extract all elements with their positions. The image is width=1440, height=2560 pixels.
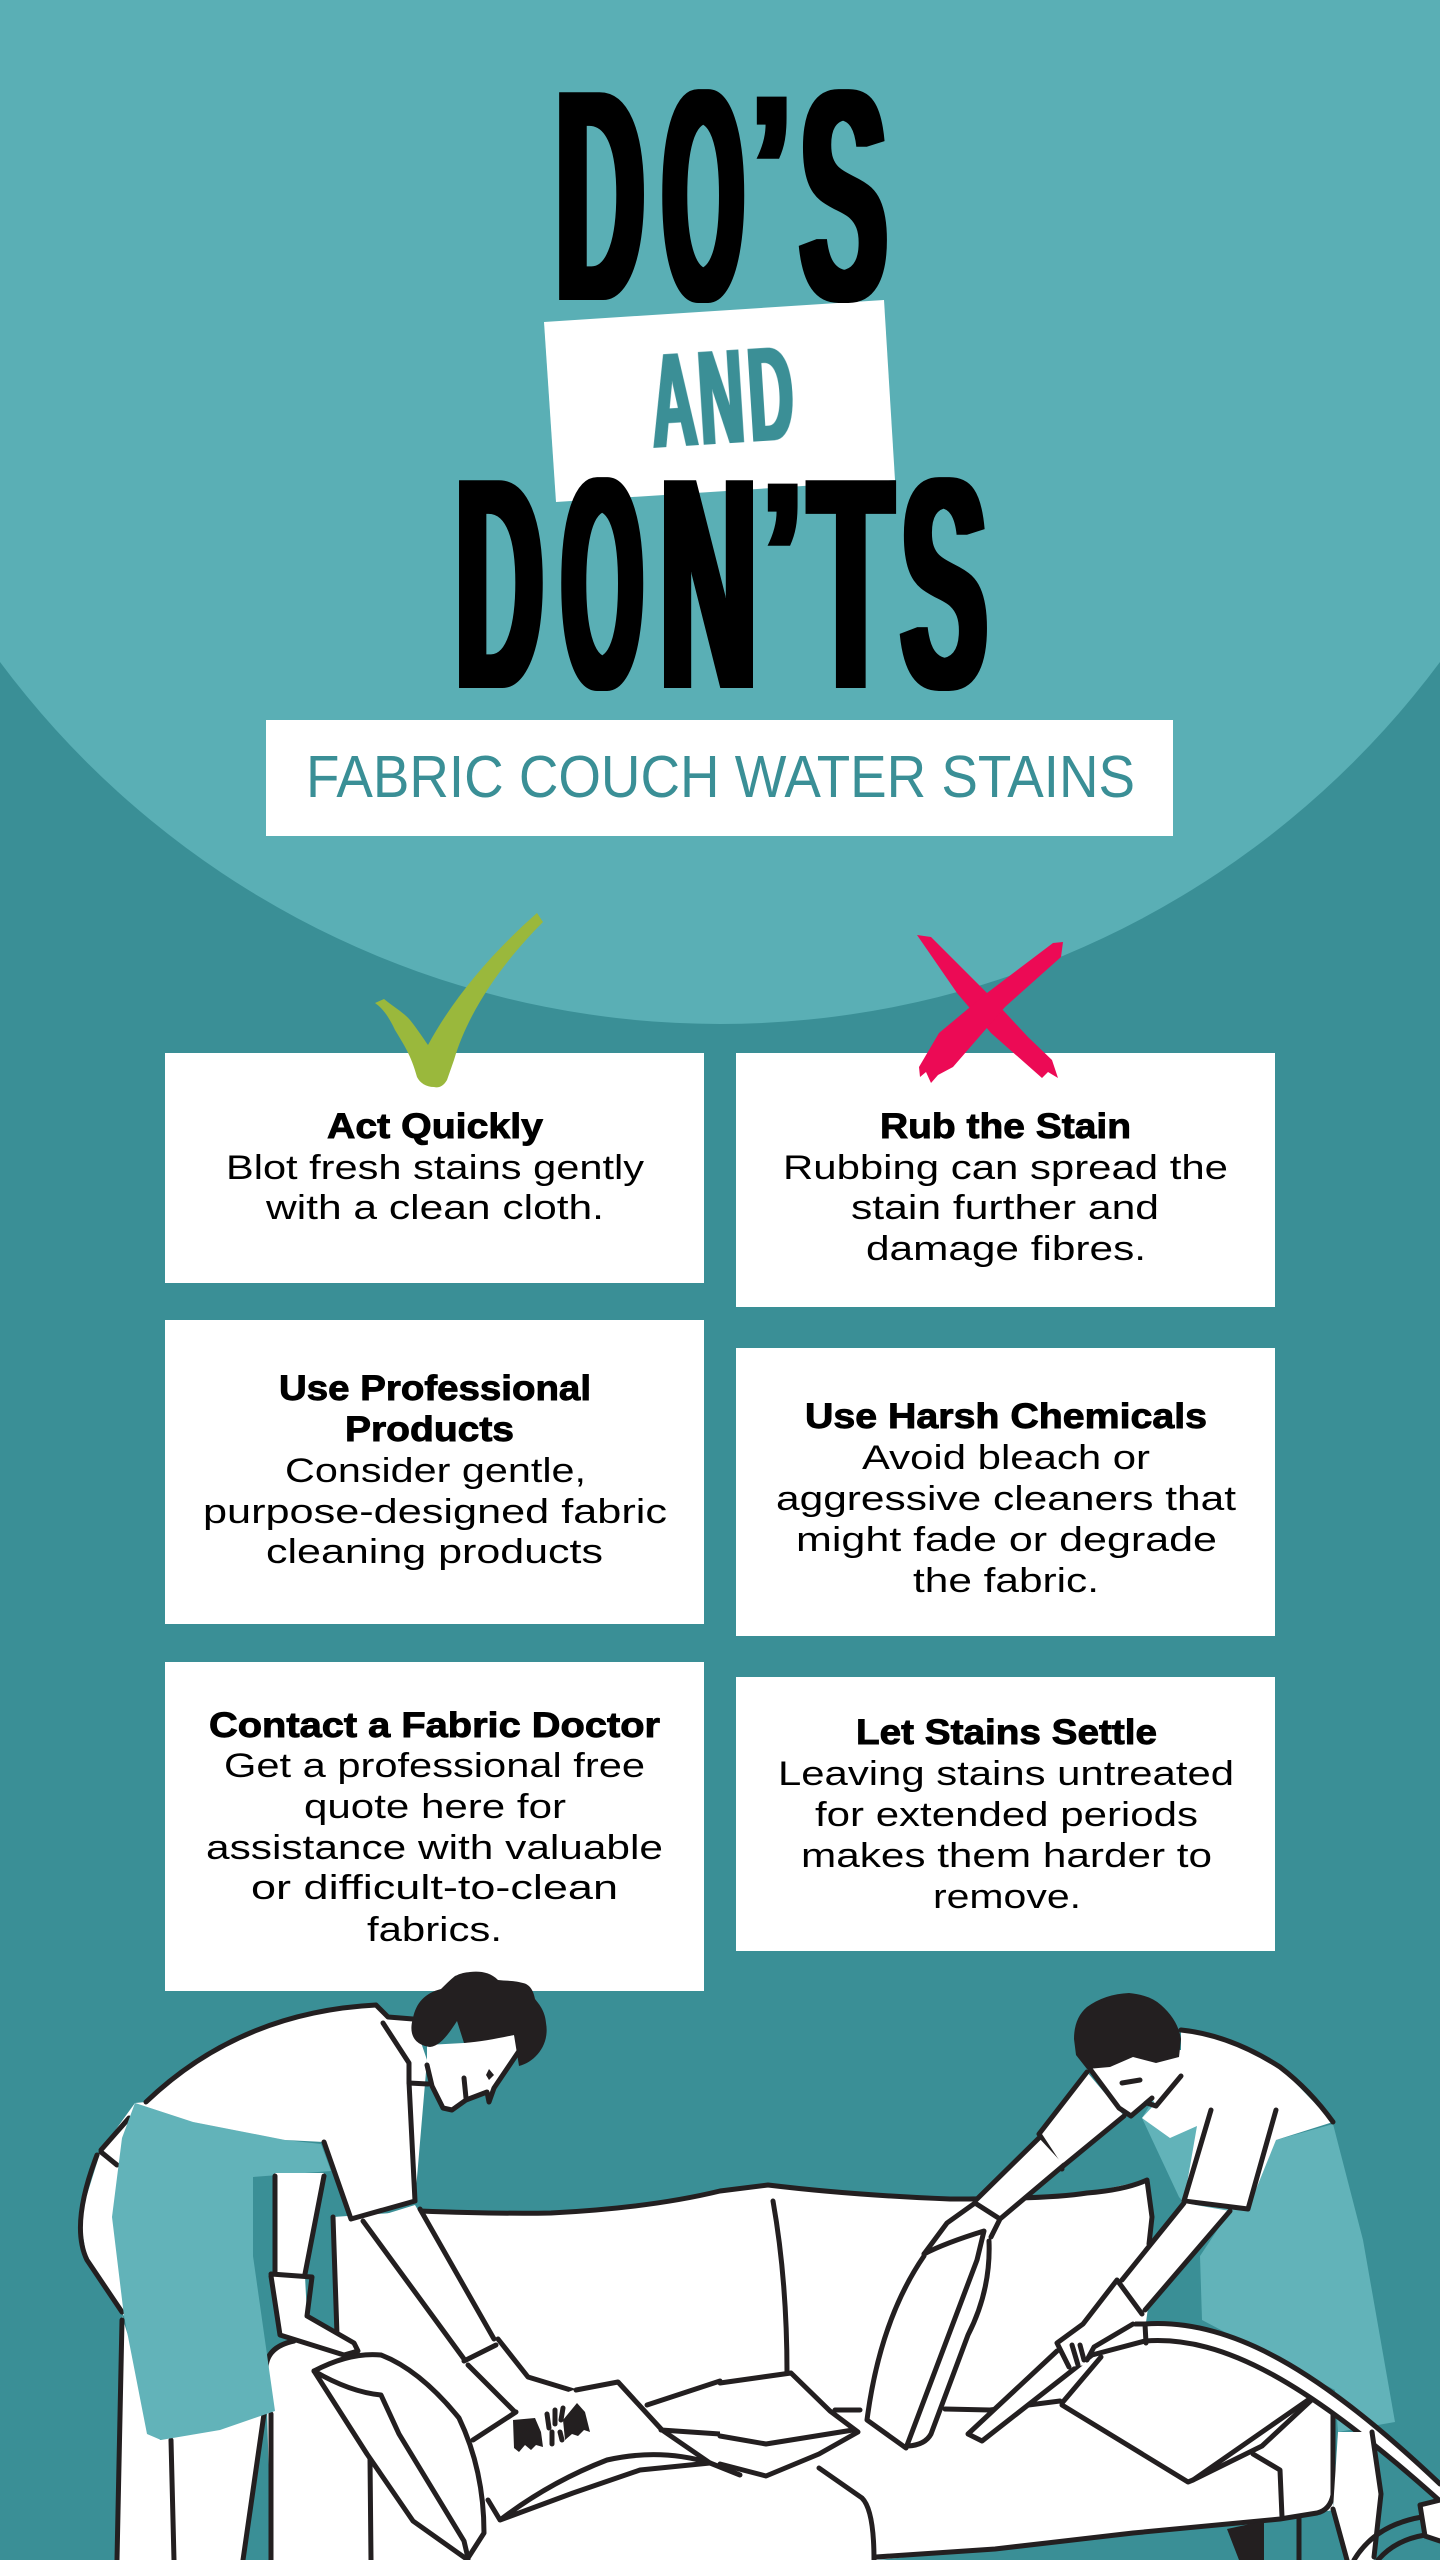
text block: avoid <box>776 1439 1237 1600</box>
title: DON'TS: ’ <box>763 436 802 682</box>
text block: rubbing: stain further and <box>851 1189 1159 1227</box>
apron <box>1142 2053 1395 2432</box>
text block: rubbing: Rubbing can spread the <box>783 1149 1228 1187</box>
panel: do 3 <box>165 1662 704 1991</box>
text block: quote: quote here for <box>304 1788 566 1826</box>
panel: don't 1 <box>736 1053 1275 1307</box>
subtitle text: FABRIC COUCH WATER STAINS <box>306 744 1135 810</box>
text block: blot: Blot fresh stains gently <box>226 1149 644 1187</box>
face <box>427 2035 519 2110</box>
back arm and glove <box>271 2173 358 2355</box>
text block: quote <box>206 1747 663 1949</box>
heading: Use Professional Products: Products <box>345 1410 514 1449</box>
torso <box>135 2005 428 2219</box>
text block: quote: fabrics. <box>367 1911 502 1949</box>
forearm and hand <box>924 2138 1064 2254</box>
icon: green check <box>375 913 543 1087</box>
cushion under left hand <box>473 2381 740 2520</box>
hand fingers <box>513 2403 590 2452</box>
title: DO'S: O <box>663 27 743 364</box>
torso <box>1142 2030 1333 2209</box>
title: DON'TS: D <box>456 415 543 752</box>
tilted white banner with AND <box>544 300 895 502</box>
illustration: right-hand cushion, hose and vacuum <box>968 2280 1440 2560</box>
icon: red cross <box>917 935 1063 1083</box>
text block: avoid: the fabric. <box>913 1562 1099 1600</box>
face <box>1090 2050 1181 2116</box>
subtitle box <box>266 720 1173 836</box>
text block: consider <box>203 1452 667 1571</box>
text block: leaving: makes them harder to <box>801 1837 1212 1875</box>
title: DON'TS <box>456 415 987 752</box>
title: DO'S: S <box>800 27 887 364</box>
text block: blot: with a clean cloth. <box>265 1189 604 1227</box>
panel: don't 3 <box>736 1677 1275 1951</box>
seat cushion <box>1062 2341 1321 2482</box>
person legs <box>1333 2432 1381 2560</box>
title: DO'S: ’ <box>752 49 791 295</box>
illustration: left person <box>80 1972 576 2560</box>
hair <box>1074 1993 1181 2069</box>
illustration: right person <box>867 1993 1395 2448</box>
upright pillow <box>867 2231 991 2448</box>
apron <box>112 2103 331 2440</box>
text block: avoid: aggressive cleaners that <box>776 1480 1237 1518</box>
title: DON'TS: S <box>901 415 987 752</box>
illustration: cushions on sofa, left <box>314 2355 858 2560</box>
text block: leaving: remove. <box>933 1878 1081 1916</box>
vacuum body <box>1354 2500 1440 2560</box>
text block: quote: or difficult-to-clean <box>251 1869 618 1907</box>
text block: rubbing: damage fibres. <box>866 1230 1146 1268</box>
text block: leaving <box>778 1755 1234 1916</box>
text block: blot <box>226 1149 644 1227</box>
heading: Let Stains Settle: Let Stains Settle <box>856 1713 1157 1752</box>
heading: Act Quickly: Act Quickly <box>327 1107 544 1146</box>
heading: Rub the Stain: Rub the Stain <box>880 1107 1131 1146</box>
text block: avoid: Avoid bleach or <box>862 1439 1150 1477</box>
header circle <box>0 0 1440 1024</box>
illustration: sofa <box>266 2180 1333 2560</box>
text block: avoid: might fade or degrade <box>796 1521 1217 1559</box>
heading: Use Harsh Chemicals: Use Harsh Chemicals <box>805 1397 1207 1436</box>
glove <box>1057 2280 1142 2367</box>
panel: don't 2 <box>736 1348 1275 1636</box>
title: DON'TS: N <box>660 415 757 752</box>
title: DON'TS: O <box>562 415 642 752</box>
text block: leaving: for extended periods <box>815 1796 1198 1834</box>
hair <box>411 1972 547 2066</box>
upper arm <box>1039 2072 1124 2169</box>
right seat cushion, centre <box>720 2373 858 2476</box>
front arm <box>363 2205 576 2420</box>
left pillow <box>314 2355 484 2560</box>
text block: rubbing <box>783 1149 1228 1268</box>
title: DON'TS: T <box>809 415 893 752</box>
text block: consider: purpose-designed fabric <box>203 1493 667 1531</box>
legs <box>117 2316 264 2560</box>
word: AND: AND <box>646 318 798 477</box>
heading: Contact a Fabric Doctor: Contact a Fabric Doctor <box>209 1706 660 1745</box>
heading: Use Professional Products: Use Professional <box>279 1369 591 1408</box>
text block: consider: cleaning products <box>266 1533 603 1571</box>
vacuum wand <box>968 2324 1146 2441</box>
heading: Use Professional Products <box>279 1369 591 1449</box>
hip <box>80 2103 150 2316</box>
title: DO'S: D <box>556 27 644 364</box>
hose <box>1145 2324 1440 2501</box>
text block: leaving: Leaving stains untreated <box>778 1755 1234 1793</box>
text block: quote: assistance with valuable <box>206 1829 663 1867</box>
text block: quote: Get a professional free <box>224 1747 645 1785</box>
panel: do 2 <box>165 1320 704 1624</box>
text block: consider: Consider gentle, <box>285 1452 586 1490</box>
second arm <box>1122 2203 1230 2310</box>
title: DO'S <box>556 27 887 364</box>
panel: do 1 <box>165 1053 704 1283</box>
